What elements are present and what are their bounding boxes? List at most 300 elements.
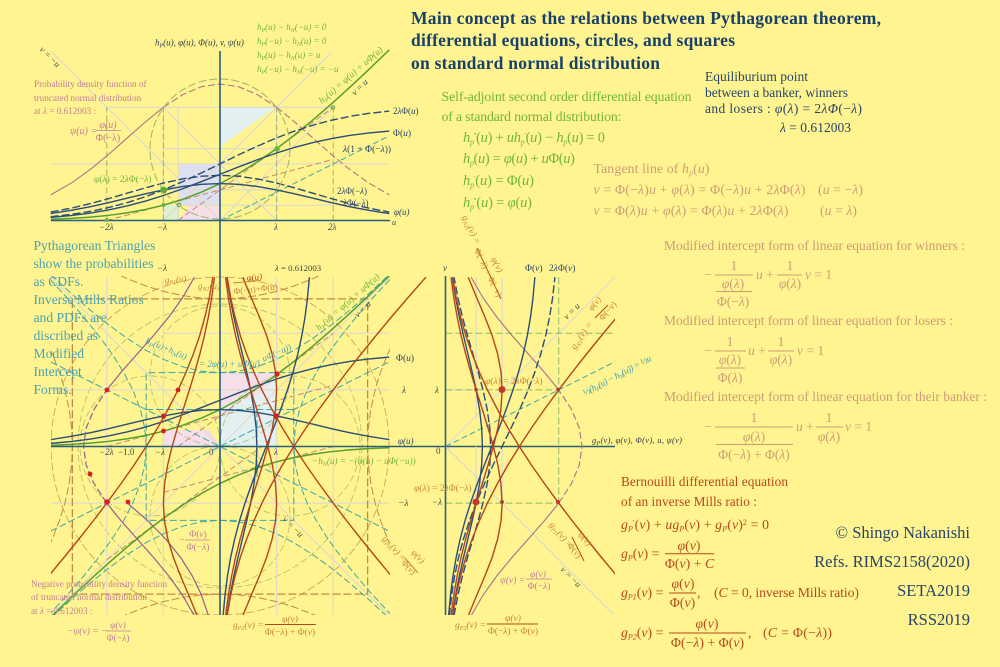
top plot labels: (u) = φ(u) + uΦ(u) [323, 45, 385, 101]
top plot labels: P [260, 28, 266, 34]
bottom left plot labels: P2 [237, 626, 244, 632]
title: Main concept as the relations between Pythagorean theorem, [411, 8, 881, 28]
text block: self-adjoint differential equation: h [463, 195, 470, 211]
text block: Pythagorean triangles note: Modified [34, 346, 84, 361]
text block: Pythagorean triangles note: Pythagorean Triangles [34, 238, 155, 253]
right plot labels: (v) = [575, 320, 595, 342]
text block: copyright and references: Refs. RIMS2158(2020) [814, 552, 970, 571]
text block: modified intercept forms: Modified intercept form of linear equation for their banker : [664, 389, 987, 404]
text block: modified intercept forms: 1 [751, 410, 757, 425]
brown dashed squares and curves [51, 276, 390, 615]
top plot labels: φ(u) [394, 207, 409, 217]
top plot labels: h [257, 64, 262, 74]
right plot labels: ½(h [582, 383, 599, 399]
bottom left plot labels: − [179, 535, 185, 546]
text block: tangent line equations: v = Φ(−λ)u + φ(λ) = Φ(−λ)u + 2λΦ(λ) [594, 182, 806, 198]
top plot labels: (−u) − h [265, 64, 297, 74]
right plot labels: 0 [436, 446, 441, 456]
curve h_P(u) [51, 50, 389, 219]
bottom left plot labels: Φ(−λ) [107, 633, 129, 644]
text block: Bernoulli differential equation: φ(v) [678, 538, 700, 554]
right plot labels: Φ(v) [525, 263, 542, 274]
bottom left plot labels: N1 [202, 287, 210, 293]
red inverse Mills ratio curves [14, 277, 426, 616]
text block: Bernoulli differential equation: Φ(v) [670, 595, 695, 611]
bottom left plot labels: N [170, 352, 178, 360]
top plot labels: 2λΦ(−λ) [337, 186, 367, 196]
top plot labels: h [257, 22, 262, 32]
text block: self-adjoint differential equation: ( [526, 130, 531, 146]
right plot labels: Φ(−λ) + Φ(v) [488, 626, 538, 637]
curves Phi, phi and their 2-lambda multiples [51, 111, 389, 217]
text block: Pythagorean triangles note: and PDFs are [34, 310, 107, 325]
text block: equilibrium point: and losers : φ(λ) = 2λΦ(−λ) [705, 101, 862, 116]
text block: modified intercept forms: v = 1 [805, 267, 832, 282]
text block: Bernoulli differential equation: g [621, 585, 628, 600]
tangent lines [107, 107, 333, 220]
text block: Bernoulli differential equation: v) = [637, 546, 659, 561]
right plot labels: Φ(v) [565, 541, 584, 560]
right plot labels: ψ(v) = [500, 575, 525, 586]
line v = u/2 [220, 136, 389, 220]
right plot labels: P1 [548, 527, 558, 536]
bottom left plot labels: φ(v) [410, 548, 427, 565]
top plot labels: N [290, 56, 296, 62]
bottom left plot labels: h [314, 323, 325, 333]
text block: self-adjoint differential equation: ( [476, 130, 481, 146]
navy curves [51, 277, 389, 616]
right plot axis [444, 276, 446, 615]
text block: modified intercept forms: Φ(−λ) [717, 294, 749, 309]
right plot labels: 2λΦ(v) [549, 263, 575, 274]
bottom left plot labels: P1 [382, 540, 391, 550]
top plot labels: P [324, 97, 331, 105]
green points [105, 106, 335, 222]
text block: Bernoulli differential equation: , [748, 625, 751, 640]
right plot labels: N [618, 373, 626, 381]
text block: Bernoulli differential equation: of an inverse Mills ratio : [621, 494, 757, 509]
text block: Pythagorean triangles note: discribed as [34, 328, 98, 343]
text block: modified intercept forms: − [704, 267, 712, 282]
text block: self-adjoint differential equation: u) + uh [481, 130, 521, 146]
right plot labels: g [569, 342, 580, 352]
text block: modified intercept forms: φ(λ) [722, 276, 744, 291]
text block: tangent line equations: (u = −λ) [818, 182, 863, 198]
bottom left plot labels: Φ(u) [396, 353, 414, 364]
right plot labels: P [595, 386, 602, 394]
text block: modified intercept forms: φ(λ) [719, 352, 741, 367]
text block: Bernoulli differential equation: v) = [641, 625, 663, 640]
top plot labels: λ(1 + Φ(−λ)) [342, 144, 391, 155]
tangent lines [107, 333, 333, 560]
top plot labels: ψ(u) = [70, 126, 97, 137]
bottom left plot labels: Negative probability density function [31, 579, 168, 589]
right plot labels: φ(v) [488, 255, 505, 275]
bottom left plot labels: (u)+h [152, 339, 176, 356]
text block: tangent line equations [594, 161, 863, 219]
right plot labels: Φ(−λ) [528, 581, 550, 592]
bottom left plot labels: 0 [209, 447, 214, 457]
text block: Bernoulli differential equation: (C = 0, inverse Mills ratio) [714, 585, 859, 601]
title: on standard normal distribution [411, 53, 660, 73]
circles [78, 304, 362, 588]
right plot labels: v = −u [559, 564, 584, 590]
top plot labels: −λ [157, 222, 167, 232]
right plot labels: (v) = [464, 224, 483, 246]
right plot labels: Φ(−λ) + Φ(−v) [472, 246, 504, 298]
text block: modified intercept forms: 1 [787, 258, 793, 273]
bottom left plot labels: Φ(v) [400, 558, 418, 577]
text block: equilibrium point: λ = 0.612003 [779, 120, 851, 135]
red curves [450, 277, 615, 615]
text block: Bernoulli differential equation: v) [732, 517, 743, 532]
text block: Bernoulli differential equation: g [621, 517, 628, 532]
text block: Bernoulli differential equation: P [627, 554, 633, 562]
text block: Pythagorean triangles note: as CDFs. [34, 274, 83, 289]
text block: self-adjoint differential equation: ( [567, 130, 572, 146]
text block: Bernoulli differential equation: v) = [641, 585, 663, 600]
top plot labels: φ(u) [99, 120, 117, 131]
top plot labels: (u) = u [295, 50, 321, 60]
top plot labels: λΦ(−λ) [342, 198, 368, 208]
top plot labels: Φ(u) [393, 128, 411, 139]
text block: self-adjoint differential equation: u) = 0 [572, 130, 605, 146]
text block: tangent line equations: (u = λ) [820, 203, 857, 219]
text block: modified intercept forms: 1 [731, 258, 737, 273]
text block: equilibrium point: Equiliburium point [705, 69, 808, 84]
bottom left plot labels: λ = 0.612003 [274, 263, 322, 273]
bottom left plot labels [31, 263, 427, 644]
line u/2 [446, 362, 615, 446]
text block: self-adjoint differential equation: ( [475, 173, 480, 189]
right plot labels: (v) = [554, 529, 575, 550]
right plot labels: N1 [576, 339, 585, 349]
text block: Bernoulli differential equation: ( [637, 585, 642, 601]
text block: Bernoulli differential equation: = 0 [747, 517, 769, 532]
text block: Bernoulli differential equation [621, 474, 859, 651]
text block: Bernoulli differential equation: P [721, 524, 727, 534]
top plot labels: h [317, 96, 328, 106]
text block: tangent line equations: Tangent line of h [594, 161, 689, 176]
top plot labels: φ(λ) = 2λΦ(−λ) [94, 174, 151, 185]
bottom left plot labels: φ(u) [246, 271, 263, 283]
text block: Bernoulli differential equation: g [621, 546, 628, 561]
text block: self-adjoint differential equation: '' [474, 132, 477, 140]
colored regions [164, 373, 276, 446]
text block: Bernoulli differential equation: v) + g [689, 517, 722, 532]
bottom left plot labels: Φ(−u)+Φ(u) [233, 282, 278, 296]
top plot labels: (u) − h [265, 22, 291, 32]
top plot labels: (u) = 0 [301, 36, 327, 46]
right plot labels: P2 [459, 626, 466, 632]
top plot labels: (−u) = −u [301, 64, 339, 74]
red points [88, 371, 280, 505]
text block: modified intercept forms [664, 238, 987, 462]
text block: Bernoulli differential equation: , [697, 585, 700, 600]
text block: modified intercept forms: φ(λ) [770, 352, 792, 367]
colored triangles and squares [164, 108, 275, 220]
bottom left plot labels: φ(v) [282, 614, 298, 625]
bottom left plot labels: −1.0 [118, 447, 135, 457]
psi(v) curve [471, 277, 582, 616]
top plot labels [34, 22, 418, 232]
top plot labels: (u) − h [265, 50, 291, 60]
text block: modified intercept forms: u + [756, 267, 774, 282]
text block: Bernoulli differential equation: ( [684, 517, 689, 533]
bottom left plot labels: P [147, 342, 154, 350]
teal dashed curves and lines [48, 275, 392, 618]
bottom left plot labels: −h [312, 456, 323, 466]
right plot labels: (v) = [466, 620, 486, 631]
text block: self-adjoint differential equation: p [469, 138, 474, 146]
top plot labels: truncated normal distribution [34, 93, 142, 103]
text block: Bernoulli differential equation: P [627, 524, 633, 534]
text block: Bernoulli differential equation: ( [727, 517, 732, 533]
text block: modified intercept forms: Modified intercept form of linear equation for winners : [664, 238, 965, 253]
text block: modified intercept forms: v = 1 [845, 419, 872, 434]
right plot labels: g [455, 621, 460, 631]
text block: Bernoulli differential equation: φ(v) [696, 616, 718, 632]
top plot labels: P [260, 56, 266, 62]
top plot labels: λ [273, 222, 278, 232]
right plot labels: g [547, 521, 557, 531]
bottom left plot labels: λ [401, 385, 406, 395]
bottom left plot labels: P1 [168, 280, 176, 287]
bottom left plot labels: Φ(−λ) + Φ(v) [265, 627, 315, 638]
red curve g_P1 right side [226, 277, 390, 576]
text block: copyright and references: RSS2019 [908, 610, 970, 629]
top plot labels: v = u [349, 77, 370, 97]
text block: modified intercept forms: u + [796, 419, 814, 434]
text block: Bernoulli differential equation: Φ(−λ) + Φ(v) [671, 635, 744, 651]
top plot labels: u [392, 218, 396, 227]
text block: tangent line equations: v = Φ(λ)u + φ(λ) = Φ(λ)u + 2λΦ(λ) [594, 203, 788, 219]
text block: modified intercept forms: v = 1 [797, 343, 824, 358]
text block: equilibrium point: between a banker, winners [705, 85, 848, 100]
text block: self-adjoint differential equation: h [463, 130, 470, 146]
text block: modified intercept forms: − [704, 343, 712, 358]
right plot labels: g [459, 214, 470, 223]
right plot labels: φ(v) [586, 294, 603, 312]
text block: Bernoulli differential equation: g [621, 625, 628, 640]
right plot labels: g [592, 435, 596, 445]
text block: Bernoulli differential equation: P1 [627, 592, 637, 602]
bottom left plot labels: P [321, 324, 328, 332]
right plot points [473, 386, 560, 505]
top plot labels: N [296, 70, 302, 76]
right plot labels: N2 [460, 219, 469, 229]
bottom left plot labels: g [380, 534, 390, 545]
bottom left plot labels: (u) [210, 281, 220, 291]
curve psi(u) [51, 84, 389, 195]
text block: self-adjoint differential equation: p [469, 180, 474, 190]
text block: Bernoulli differential equation: Bernouilli differential equation [621, 474, 788, 489]
bottom left plot labels: = 2φ(u) + uΦ(u) [199, 359, 260, 369]
title [411, 8, 881, 73]
axes [51, 260, 615, 615]
text block: Pythagorean triangles note: show the probabilities [34, 256, 154, 271]
text block: equilibrium point [705, 69, 862, 135]
bottom left plot labels: Φ(−λ) [187, 542, 209, 553]
text block: modified intercept forms: u + [748, 343, 766, 358]
top plot labels: P [260, 42, 266, 48]
text block: self-adjoint differential equation: u) − h [530, 130, 564, 146]
text block: self-adjoint differential equation: Self-adjoint second order differential equation [442, 89, 692, 104]
top plot labels: Probability density function of [34, 79, 147, 89]
title: differential equations, circles, and squares [411, 30, 735, 50]
top plot labels: Φ(−λ) [96, 133, 120, 144]
top plot labels: N [296, 42, 302, 48]
bottom left plot labels: φ(u) [398, 436, 413, 446]
right plot labels: (u)) = ½u [619, 353, 654, 378]
top plot labels: at λ = 0.612003 : [34, 106, 96, 116]
text block: Pythagorean triangles note: Inverse Mills Ratios [34, 292, 144, 307]
text block: modified intercept forms: 1 [727, 334, 733, 349]
text block: self-adjoint differential equation: u) = Φ(u) [480, 173, 534, 189]
top plot labels: 2λ [328, 222, 336, 232]
right plot labels: φ(λ) = 2λΦ(−λ) [414, 483, 471, 494]
text block: self-adjoint differential equation: p [469, 158, 474, 168]
text block: Pythagorean triangles note: Forms. [34, 382, 72, 397]
text block: modified intercept forms: Φ(λ) [718, 370, 742, 385]
bottom left plot labels: h [144, 336, 152, 347]
text block: self-adjoint differential equation: ( [474, 151, 479, 167]
bottom left plot labels: v = u [352, 299, 373, 319]
right plot labels: λ [434, 385, 439, 395]
text block: self-adjoint differential equation: u) = φ(u) + uΦ(u) [478, 151, 575, 167]
text block: self-adjoint differential equation: p [562, 138, 567, 146]
right plot labels: v = u [561, 301, 582, 321]
bottom left plot labels: (u) = φ(u) + uΦ(u) [320, 272, 382, 328]
bottom left plot labels: g [233, 621, 238, 631]
text block: copyright and references: SETA2019 [897, 581, 970, 600]
text block: self-adjoint differential equation [442, 89, 692, 212]
chart: top plot of h_P(u), phi, Phi and psi [34, 22, 418, 260]
right plot labels: v [443, 263, 447, 273]
navy curves [449, 277, 555, 616]
text block: modified intercept forms: φ(λ) [818, 429, 840, 444]
right plot labels: (v), φ(v), Φ(v), u, ψ(v) [600, 435, 682, 445]
text block: modified intercept forms: − [704, 419, 712, 434]
text block: self-adjoint differential equation: '' [474, 196, 477, 206]
bottom left plot labels: (v) = [387, 542, 409, 564]
bottom left plot labels: g [164, 275, 170, 285]
text block: Bernoulli differential equation: (C = Φ(−λ)) [763, 625, 832, 641]
right plot labels: φ(v) [576, 530, 594, 548]
bottom left plot labels: (u) = −(φ(u) − uΦ(−u)) [327, 456, 416, 466]
bottom left plot labels: (v) = [244, 620, 264, 631]
top plot labels: (−u) = 0 [295, 22, 327, 32]
bottom left plot labels: −λ [155, 447, 165, 457]
text block: modified intercept forms: Φ(−λ) + Φ(λ) [718, 447, 790, 462]
top plot labels: h [155, 38, 160, 48]
bottom left plot labels: − uΦ(−u)) [253, 342, 293, 367]
top plot labels: −2λ [99, 222, 114, 232]
right plot labels: P [596, 441, 601, 447]
right plot labels [414, 213, 682, 637]
axes of top plot [51, 51, 390, 260]
text block: Pythagorean triangles note [34, 238, 155, 397]
top plot labels: (−u) − h [265, 36, 297, 46]
bottom left plot labels: at λ = 0.612003 : [31, 606, 92, 616]
text block: tangent line equations: p [688, 168, 693, 178]
text block: self-adjoint differential equation: h [463, 173, 470, 189]
text block: Bernoulli differential equation: P [678, 524, 684, 534]
bottom left plot labels: Φ(v) [189, 529, 207, 540]
right plot labels: (u) − h [596, 370, 622, 391]
bottom left plot labels: v = −u [281, 514, 306, 540]
right plot labels: φ(v) [505, 613, 521, 624]
top plot labels: 2λΦ(u) [393, 106, 418, 116]
text block: Bernoulli differential equation: P2 [627, 632, 637, 642]
text block: copyright and references: © Shingo Nakanishi [836, 523, 970, 542]
text block: self-adjoint differential equation: p [520, 138, 525, 146]
top plot labels: v = −u [38, 44, 63, 70]
bottom left plot labels: λ [273, 447, 278, 457]
text block: Bernoulli differential equation: ( [635, 517, 640, 533]
top plot labels: P [158, 44, 164, 50]
text block: Bernoulli differential equation: ( [637, 625, 642, 641]
chart: right plot rotated, functions of v [414, 213, 682, 637]
text block: copyright and references [814, 523, 970, 629]
right plot labels: φ(λ) = 2λΦ(−λ) [485, 376, 542, 387]
green curves [51, 276, 389, 617]
text block: Bernoulli differential equation: 2 [743, 518, 747, 527]
right plot labels: −λ [432, 497, 442, 507]
text block: modified intercept forms: φ(λ) [743, 429, 765, 444]
top plot labels: P [260, 70, 266, 76]
bottom left plot labels: −2λ [99, 447, 114, 457]
text block: self-adjoint differential equation: ' [474, 174, 476, 184]
green dashed circle [150, 79, 290, 219]
text block: Bernoulli differential equation: φ(v) [672, 576, 694, 592]
top plot labels: h [257, 36, 262, 46]
bottom left plot labels: −λ [398, 499, 409, 509]
bottom left plot labels: φ(v) [110, 620, 126, 631]
text block: modified intercept forms: 1 [778, 334, 784, 349]
text block: Bernoulli differential equation: v) + ug [639, 517, 679, 532]
right plot labels: Φ(−v) [597, 299, 618, 322]
purple psi curves [83, 277, 209, 616]
bottom left plot labels: of truncated normal distribution [31, 592, 147, 602]
right plot labels: φ(v) [530, 569, 546, 580]
text block: self-adjoint differential equation: h [463, 151, 470, 167]
bottom left plot labels: g [198, 281, 202, 291]
bottom left plot labels: N [322, 462, 328, 468]
text block: tangent line equations: ( [693, 161, 698, 177]
text block: tangent line equations: u) [698, 161, 710, 176]
bottom left plot labels: −λ [157, 263, 167, 273]
text block: Bernoulli differential equation: ( [633, 546, 638, 562]
top plot labels: h [257, 50, 262, 60]
bottom left plot labels: (u) [176, 274, 187, 284]
text block: self-adjoint differential equation: u) = φ(u) [481, 195, 532, 211]
bottom left plot labels: −ψ(v) = − [67, 626, 107, 637]
text block: self-adjoint differential equation: ' [524, 132, 526, 140]
text block: modified intercept forms: φ(λ) [779, 276, 801, 291]
text block: modified intercept forms: 1 [826, 410, 832, 425]
text block: self-adjoint differential equation: ( [476, 195, 481, 211]
text block: self-adjoint differential equation: of a standard normal distribution: [442, 109, 622, 124]
top plot labels: (u), φ(u), Φ(u), v, ψ(u) [163, 38, 244, 48]
top plot labels: N [290, 28, 296, 34]
text block: modified intercept forms: Modified intercept form of linear equation for losers : [664, 313, 953, 328]
text block: Pythagorean triangles note: Intercept [34, 364, 82, 379]
text block: self-adjoint differential equation: p [469, 202, 474, 212]
text block: Bernoulli differential equation: ' [633, 518, 635, 528]
text block: Bernoulli differential equation: Φ(v) + C [665, 556, 715, 572]
bottom left plot labels: (u) [175, 348, 189, 361]
